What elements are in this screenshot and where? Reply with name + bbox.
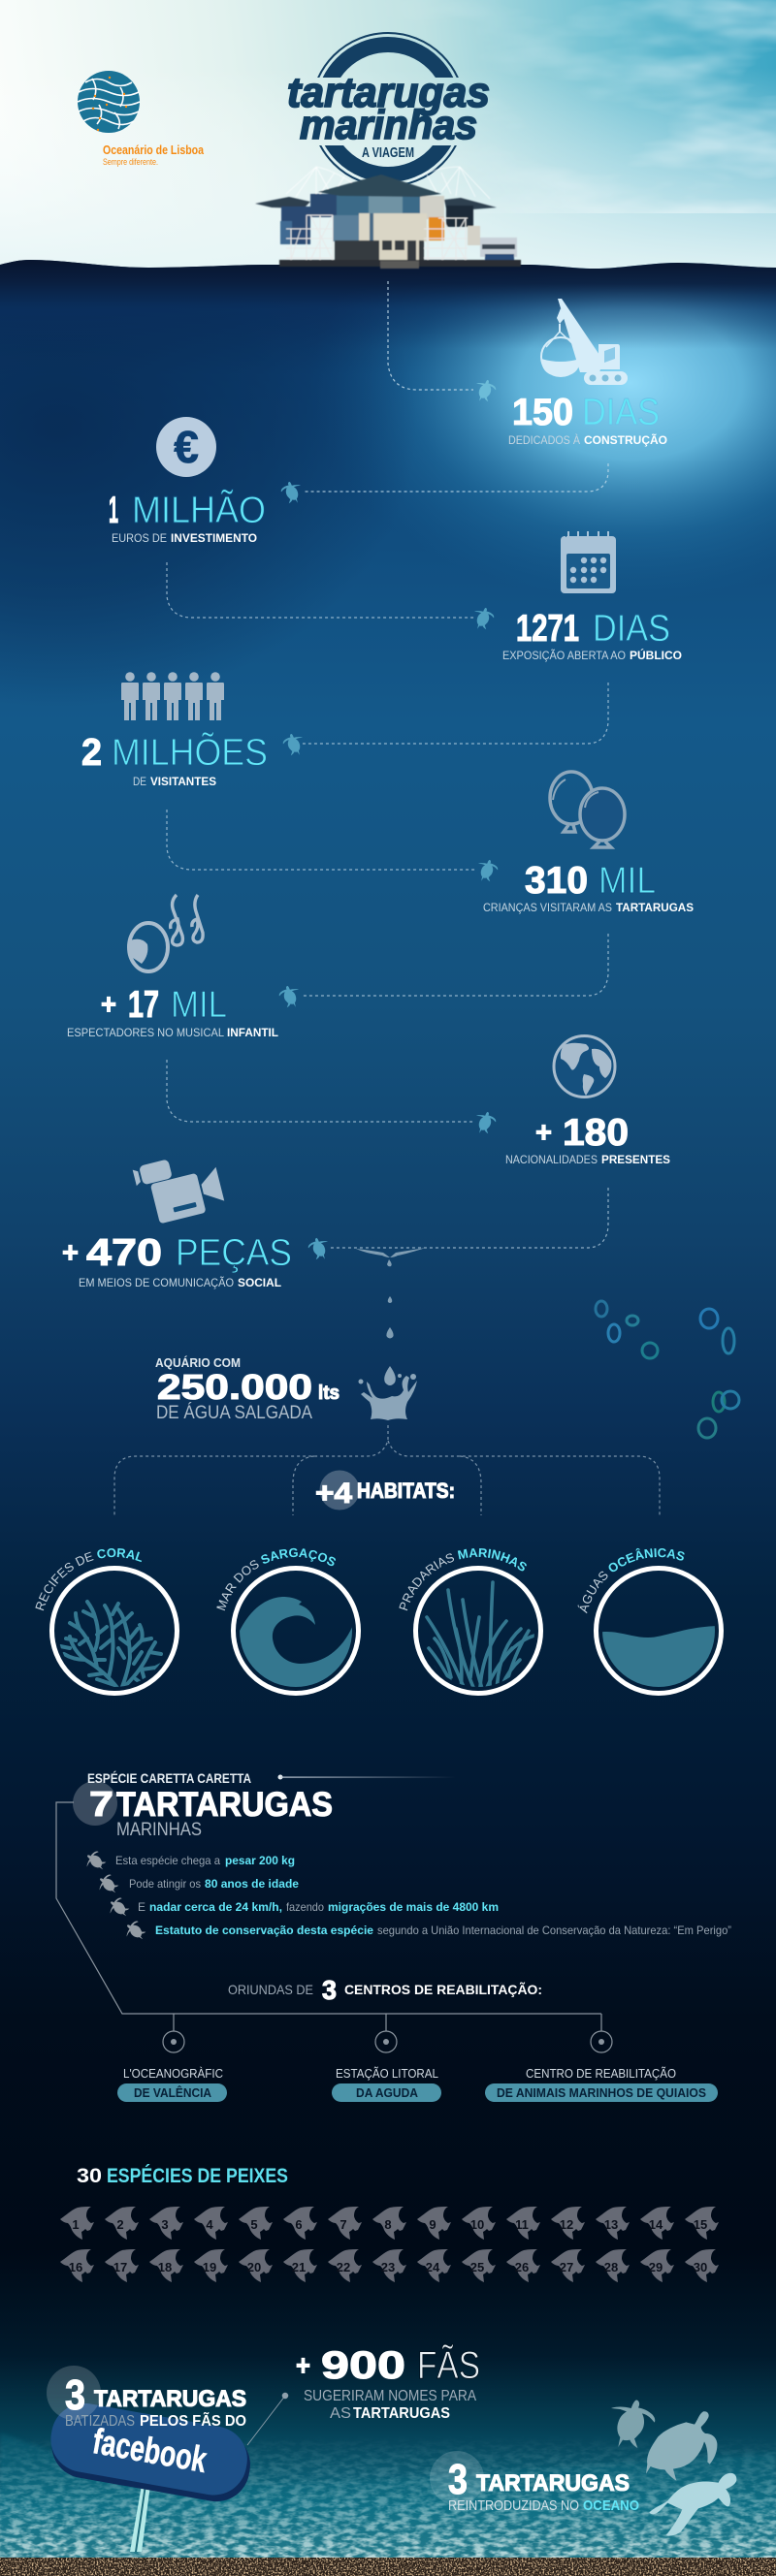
icon: balloons — [550, 772, 625, 847]
caption: BATIZADAS — [65, 2413, 135, 2430]
caption: INFANTIL — [227, 1026, 278, 1039]
unit: MILHÕES — [112, 731, 268, 774]
icon: seagrass — [424, 1582, 539, 1692]
fish grid: 11 — [515, 2217, 529, 2232]
fish grid: 29 — [649, 2260, 663, 2274]
bullet 3 — [107, 1895, 499, 1919]
number: +4 — [315, 1478, 352, 1510]
icon: splash — [359, 1366, 417, 1420]
turtle marker 1 — [476, 380, 496, 401]
stat: 1 milhao — [109, 417, 266, 545]
number: 310 — [525, 860, 588, 902]
centre 2: Aguda — [332, 2031, 441, 2102]
unit: MIL — [171, 984, 227, 1026]
fish grid: 15 — [694, 2217, 707, 2232]
marker — [591, 2031, 612, 2052]
icon: people — [121, 672, 224, 720]
caption: REINTRODUZIDAS NO — [448, 2497, 579, 2514]
curved label: ÁGUAS OCEÂNICAS — [578, 1547, 685, 1613]
caption: PÚBLICO — [630, 648, 682, 662]
title: A VIAGEM — [362, 144, 414, 161]
water drops — [356, 1248, 426, 1338]
icon: ocean — [602, 1626, 715, 1687]
title: marinhas — [300, 102, 477, 147]
sandy ocean floor — [0, 2414, 776, 2576]
caption: DEDICADOS À — [508, 432, 580, 447]
ring — [52, 1569, 177, 1693]
fish grid: 27 — [560, 2260, 573, 2274]
unit: PEÇAS — [176, 1232, 292, 1274]
sign post — [130, 2485, 150, 2552]
ring — [415, 1569, 541, 1693]
centre 3: Quiaios — [485, 2031, 718, 2102]
sea turtles silhouettes — [611, 2400, 736, 2536]
caption: VISITANTES — [150, 775, 216, 788]
connector lines to rehabilitation centres — [56, 1802, 601, 2031]
caption: NACIONALIDADES — [505, 1153, 598, 1166]
turtle 2 — [646, 2411, 717, 2481]
plus sign: + — [535, 1117, 552, 1149]
bullet 3: fazendo — [286, 1900, 324, 1914]
bullet 3: migrações de mais de 4800 km — [328, 1900, 499, 1914]
number: 1271 — [516, 608, 579, 650]
dashed habitat tree — [114, 1425, 660, 1515]
section: seven turtles — [73, 1770, 456, 1840]
fish grid: 19 — [203, 2260, 216, 2274]
fish grid: 26 — [515, 2260, 529, 2274]
fish grid: 4 — [206, 2217, 213, 2232]
bullet 3: nadar cerca de 24 km/h, — [149, 1900, 282, 1914]
icon: crane — [541, 299, 628, 385]
brand tagline: Sempre diferente. — [103, 157, 158, 167]
name: ESTAÇÃO LITORAL — [336, 2066, 438, 2081]
turtle marker 2 — [281, 482, 301, 503]
habitat: ocean waters — [578, 1547, 724, 1696]
caption: CRIANÇAS VISITARAM AS — [483, 901, 612, 914]
sign text: facebook — [90, 2421, 210, 2480]
caption: INVESTIMENTO — [171, 531, 257, 545]
unit: MILHÃO — [132, 490, 266, 531]
turtle marker 4 — [283, 734, 303, 755]
bullet 2 — [96, 1872, 299, 1895]
fish grid: 28 — [604, 2260, 618, 2274]
icon: euro coin: € — [174, 422, 199, 472]
unit: MIL — [598, 860, 656, 902]
caption — [508, 432, 667, 447]
unit: FÃS — [417, 2343, 480, 2387]
title — [287, 69, 490, 161]
dashed path 3 — [167, 562, 475, 618]
sign board — [45, 2399, 256, 2506]
unit: lts — [318, 1383, 340, 1404]
dashed path 4 — [303, 683, 608, 744]
heading: rehabilitation centres: CENTROS DE REABILITAÇÃO: — [344, 1981, 542, 1997]
heading: TARTARUGAS — [116, 1786, 333, 1824]
heading: rehabilitation centres: ORIUNDAS DE — [228, 1982, 313, 1997]
habitat: coral reefs — [35, 1548, 179, 1696]
fish grid: 24 — [426, 2260, 440, 2274]
stat: 900 fas — [296, 2343, 480, 2422]
fish grid: 5 — [250, 2217, 258, 2232]
caption: OCEANO — [583, 2497, 639, 2514]
fish grid: 3 — [161, 2217, 169, 2232]
bullet 2: 80 anos de idade — [205, 1877, 299, 1891]
plus sign: + — [101, 989, 116, 1021]
marker — [375, 2031, 397, 2052]
stat: 150 dias — [508, 299, 667, 447]
habitat: sea meadows — [399, 1548, 543, 1696]
heading: 30 fish species: 30 — [77, 2165, 102, 2187]
dashed path 7 — [167, 1060, 475, 1122]
species label: ESPÉCIE CARETTA CARETTA — [87, 1770, 251, 1786]
connector to facebook sign — [247, 2393, 288, 2445]
fish grid: 23 — [381, 2260, 395, 2274]
caption: DE — [133, 775, 146, 788]
highlight circle — [430, 2451, 484, 2505]
fish grid: 30 — [694, 2260, 707, 2274]
caption: PRESENTES — [601, 1153, 670, 1166]
icon: euro coin — [156, 417, 216, 477]
pill: DE ANIMAIS MARINHOS DE QUIAIOS — [497, 2085, 706, 2100]
fish grid: 6 — [295, 2217, 303, 2232]
bullet 1: Esta espécie chega a — [115, 1854, 220, 1867]
icon: fish oval — [78, 71, 140, 133]
fish grid: 1 — [72, 2217, 80, 2232]
plus sign: + — [296, 2350, 310, 2382]
fish grid: 13 — [604, 2217, 618, 2232]
caption — [65, 2410, 246, 2430]
bullet 4 — [123, 1919, 731, 1942]
icon: coral — [60, 1602, 167, 1693]
centre 1: Valencia — [117, 2031, 227, 2102]
number: 900 — [321, 2344, 405, 2387]
caption: PELOS FÃS DO — [140, 2410, 246, 2430]
number: 3 — [65, 2371, 85, 2419]
caption: EUROS DE — [112, 531, 167, 545]
dashed path 5 — [167, 810, 475, 870]
caption: TARTARUGAS — [616, 901, 694, 914]
dashed path 8 — [330, 1188, 608, 1248]
bullet 1 — [83, 1849, 295, 1872]
bullet 1: pesar 200 kg — [225, 1854, 295, 1867]
subheading: MARINHAS — [116, 1820, 202, 1840]
highlight circle — [73, 1781, 117, 1826]
number: 3 — [448, 2456, 468, 2503]
caption: SOCIAL — [238, 1276, 281, 1289]
stat: 17 mil — [67, 895, 278, 1039]
stat: 180 nacionalidades — [505, 1035, 670, 1166]
pill: DE VALÊNCIA — [134, 2085, 212, 2100]
pill: DA AGUDA — [356, 2085, 419, 2100]
number: 250.000 — [157, 1367, 312, 1407]
dashed path 6 — [303, 934, 608, 996]
stat: 1 milhao: 1 — [109, 490, 118, 531]
facebook sign — [45, 2399, 256, 2552]
stat: 310 mil — [483, 772, 694, 914]
building: Oceanario — [255, 167, 521, 269]
bullet list — [83, 1849, 731, 1942]
heading: 4 habitats — [315, 1470, 455, 1511]
heading: 30 fish species: ESPÉCIES DE PEIXES — [107, 2165, 288, 2187]
unit: DIAS — [582, 392, 660, 433]
aquarium stat — [155, 1355, 417, 1423]
caption: EXPOSIÇÃO ABERTA AO — [502, 649, 626, 662]
logo: Oceanario de Lisboa — [78, 71, 205, 167]
title: tartarugas — [287, 69, 490, 116]
turtle 3 — [649, 2473, 736, 2536]
fish grid: 21 — [292, 2260, 306, 2274]
label: AQUÁRIO COM — [155, 1355, 241, 1370]
heading: rehabilitation centres — [228, 1975, 542, 2005]
fish grid: 9 — [429, 2217, 436, 2232]
icon: video camera — [132, 1148, 226, 1227]
icon: calendar — [561, 531, 616, 593]
fish grid: 8 — [384, 2217, 392, 2232]
caption: EM MEIOS DE COMUNICAÇÃO — [79, 1276, 234, 1289]
stat: 1271 dias — [502, 531, 682, 662]
fish grid: 12 — [560, 2217, 573, 2232]
ring — [596, 1569, 722, 1693]
habitat: sargasso sea — [216, 1547, 361, 1696]
fish grid: 20 — [247, 2260, 261, 2274]
turtle marker 8 — [308, 1238, 328, 1259]
curved label: MAR DOS SARGAÇOS — [216, 1547, 336, 1611]
bullet 4: segundo a União Internacional de Conservação da Natureza: “Em Perigo” — [377, 1924, 731, 1937]
stat: 3 turtles named — [47, 2366, 246, 2430]
name: L'OCEANOGRÀFIC — [123, 2066, 223, 2081]
heading: TARTARUGAS — [94, 2386, 246, 2412]
description: DE ÁGUA SALGADA — [156, 1403, 312, 1423]
bullet 2: Pode atingir os — [129, 1877, 201, 1891]
stat: 2 milhoes — [81, 672, 268, 788]
bubbles — [596, 1301, 739, 1438]
icon: headphone and notes — [128, 895, 203, 971]
curved label: RECIFES DE CORAL — [35, 1548, 142, 1611]
label: HABITATS: — [357, 1479, 455, 1503]
sky background — [0, 0, 776, 286]
fish grid: 17 — [113, 2260, 127, 2274]
fish grid: 10 — [470, 2217, 484, 2232]
turtle marker 6 — [279, 986, 299, 1007]
highlight circle — [320, 1470, 359, 1511]
number: 180 — [563, 1112, 629, 1154]
turtle marker 7 — [476, 1112, 496, 1133]
stat: 470 pecas — [62, 1148, 292, 1289]
fish grid: 2 — [116, 2217, 124, 2232]
number: 470 — [86, 1232, 162, 1274]
icon: wave — [240, 1597, 352, 1687]
ring — [233, 1569, 359, 1693]
brand name: Oceanário de Lisboa — [103, 143, 205, 157]
fish grid — [60, 2207, 719, 2282]
fish grid: 25 — [470, 2260, 484, 2274]
highlight circle — [47, 2366, 101, 2420]
bullet 4: Estatuto de conservação desta espécie — [155, 1924, 373, 1937]
name: CENTRO DE REABILITAÇÃO — [526, 2066, 676, 2081]
title ring — [311, 33, 465, 186]
bullet 3: E — [138, 1900, 146, 1914]
caption: CONSTRUÇÃO — [584, 432, 667, 447]
fish grid: 22 — [337, 2260, 350, 2274]
caption line 2: TARTARUGAS — [353, 2405, 450, 2422]
caption: ESPECTADORES NO MUSICAL — [67, 1026, 224, 1039]
heading: rehabilitation centres: 3 — [322, 1975, 337, 2005]
unit: DIAS — [593, 608, 670, 650]
turtle marker 3 — [474, 608, 494, 629]
fish grid: 18 — [158, 2260, 172, 2274]
curved label: PRADARIAS MARINHAS — [399, 1548, 527, 1611]
heading: TARTARUGAS — [476, 2470, 630, 2496]
plus sign: + — [62, 1237, 79, 1269]
fish grid: 14 — [649, 2217, 663, 2232]
fish grid: 16 — [69, 2260, 82, 2274]
caption — [505, 1153, 670, 1166]
caption — [483, 901, 694, 914]
number: 150 — [512, 392, 573, 433]
marker — [163, 2031, 184, 2052]
fish grid: 7 — [340, 2217, 347, 2232]
number: 2 — [81, 732, 102, 774]
dashed path 1 — [388, 281, 473, 390]
caption: SUGERIRAM NOMES PARA — [304, 2388, 476, 2404]
number: 7 — [89, 1784, 113, 1824]
stat: 3 turtles reintroduced — [430, 2451, 639, 2514]
number: 17 — [128, 984, 159, 1026]
turtle 1 — [611, 2400, 655, 2448]
icon: globe — [554, 1035, 615, 1097]
decorative line with dot — [277, 1774, 456, 1780]
caption line 2: AS — [330, 2405, 351, 2422]
turtle marker 5 — [478, 860, 498, 881]
dashed path 2 — [303, 463, 608, 492]
caption — [112, 531, 257, 545]
